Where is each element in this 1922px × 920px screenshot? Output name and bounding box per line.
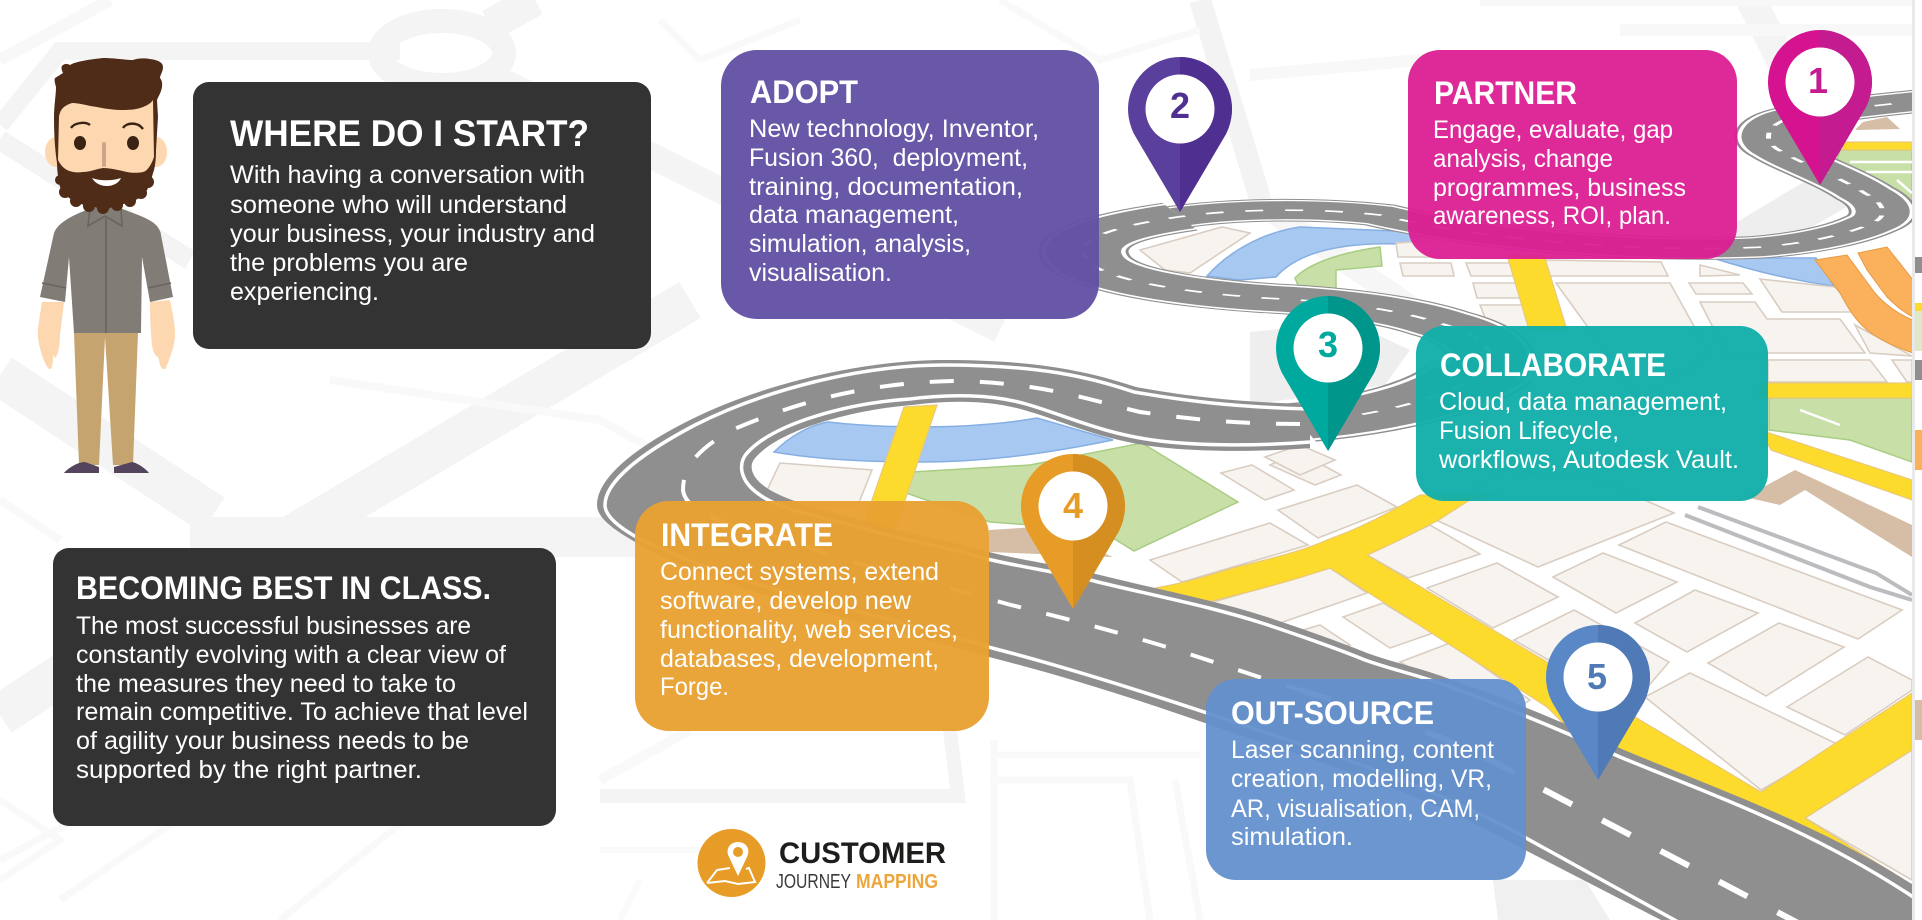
body text: Cloud, data management,	[1439, 388, 1727, 416]
body text: Fusion Lifecycle,	[1439, 417, 1619, 445]
body text: experiencing.	[230, 278, 379, 306]
panel: adopt	[721, 50, 1099, 319]
body text: With having a conversation with	[230, 161, 585, 189]
body text: awareness, ROI, plan.	[1433, 202, 1671, 230]
pin 5: 5	[1587, 656, 1607, 697]
body text: constantly evolving with a clear view of	[76, 641, 506, 669]
body text: functionality, web services,	[660, 616, 958, 644]
pin 4: 4	[1063, 485, 1083, 526]
map: yellow roads	[860, 142, 1912, 885]
heading: COLLABORATE	[1440, 347, 1666, 383]
body text: programmes, business	[1433, 174, 1686, 202]
body text: your business, your industry and	[230, 220, 595, 248]
logo: customer journey mapping	[698, 829, 946, 897]
body text: supported by the right partner.	[76, 756, 422, 784]
beard scallops	[55, 175, 154, 214]
eyes and brows	[74, 136, 86, 150]
heading: WHERE DO I START?	[230, 113, 589, 154]
pin 1: 1	[1808, 60, 1828, 101]
body text: Forge.	[660, 673, 729, 701]
panel: becoming best in class	[53, 548, 556, 826]
body text: workflows, Autodesk Vault.	[1438, 446, 1739, 474]
body text: of agility your business needs to be	[76, 727, 469, 755]
logo tagline: JOURNEY	[776, 871, 851, 893]
body text: creation, modelling, VR,	[1231, 765, 1492, 793]
panel: integrate	[635, 501, 989, 731]
body text: Connect systems, extend	[660, 558, 939, 586]
pin 2: 2	[1170, 85, 1190, 126]
character: bearded man	[38, 58, 175, 473]
panel: out-source	[1206, 679, 1526, 880]
body text	[749, 115, 1039, 287]
map: tan lots	[989, 117, 1912, 557]
map: rail tracks	[1685, 507, 1912, 600]
shoes	[64, 462, 149, 473]
panel: collaborate	[1416, 326, 1768, 501]
body text: data management,	[749, 201, 959, 229]
pin 5	[1546, 625, 1650, 780]
body text: training, documentation,	[749, 173, 1023, 201]
shirt	[40, 208, 173, 333]
nose	[102, 142, 106, 167]
body text: The most successful businesses are	[76, 612, 471, 640]
panel: where do I start	[193, 82, 651, 349]
body text: databases, development,	[660, 645, 939, 673]
body text: Laser scanning, content	[1231, 736, 1494, 764]
arms	[38, 300, 175, 369]
body text: analysis, change	[1433, 145, 1613, 173]
map: parks	[906, 150, 1912, 551]
road: near section	[597, 360, 1922, 920]
colour road map	[597, 100, 1922, 920]
winding road	[597, 100, 1922, 920]
map: rivers	[774, 227, 1834, 462]
legs	[74, 333, 138, 465]
panel: partner	[1408, 50, 1737, 259]
body text	[660, 558, 958, 701]
logo wordmark: CUSTOMER	[779, 837, 946, 870]
body text: remain competitive. To achieve that level	[76, 698, 528, 726]
logo tagline accent: MAPPING	[856, 871, 938, 893]
ears	[45, 137, 67, 167]
body text: AR, visualisation, CAM,	[1231, 795, 1480, 823]
pin 2	[1128, 57, 1232, 212]
right edge strip	[1912, 0, 1922, 920]
icon: map pin on map	[698, 829, 766, 897]
map: park paths	[1800, 162, 1912, 425]
smile	[92, 178, 121, 186]
heading: PARTNER	[1434, 75, 1577, 111]
body text: Fusion 360, deployment,	[749, 144, 1028, 172]
heading: BECOMING BEST IN CLASS.	[76, 570, 491, 606]
body text	[1231, 736, 1494, 851]
body text: software, develop new	[660, 587, 912, 615]
body text: someone who will understand	[230, 191, 567, 219]
body text	[230, 161, 595, 306]
body text: visualisation.	[749, 259, 892, 287]
body text: simulation.	[1231, 823, 1353, 851]
neck	[92, 195, 120, 219]
heading: INTEGRATE	[661, 517, 833, 553]
pin 3	[1276, 296, 1380, 451]
body text	[1438, 388, 1739, 474]
pin 1	[1768, 30, 1872, 185]
body text	[1433, 116, 1686, 230]
map: city blocks	[760, 227, 1912, 880]
body text	[76, 612, 528, 784]
pin 3: 3	[1318, 324, 1338, 365]
pin 4	[1021, 454, 1125, 609]
body text: the problems you are	[230, 249, 468, 277]
map: orange highway	[1815, 247, 1913, 353]
body text: the measures they need to take to	[76, 670, 456, 698]
body text: New technology, Inventor,	[749, 115, 1039, 143]
heading: OUT-SOURCE	[1231, 695, 1434, 731]
body text: Engage, evaluate, gap	[1433, 116, 1673, 144]
road: far sections	[1083, 100, 1922, 423]
heading: ADOPT	[750, 74, 858, 110]
face	[58, 100, 154, 173]
hair and beard	[54, 58, 163, 209]
body text: simulation, analysis,	[749, 230, 971, 258]
